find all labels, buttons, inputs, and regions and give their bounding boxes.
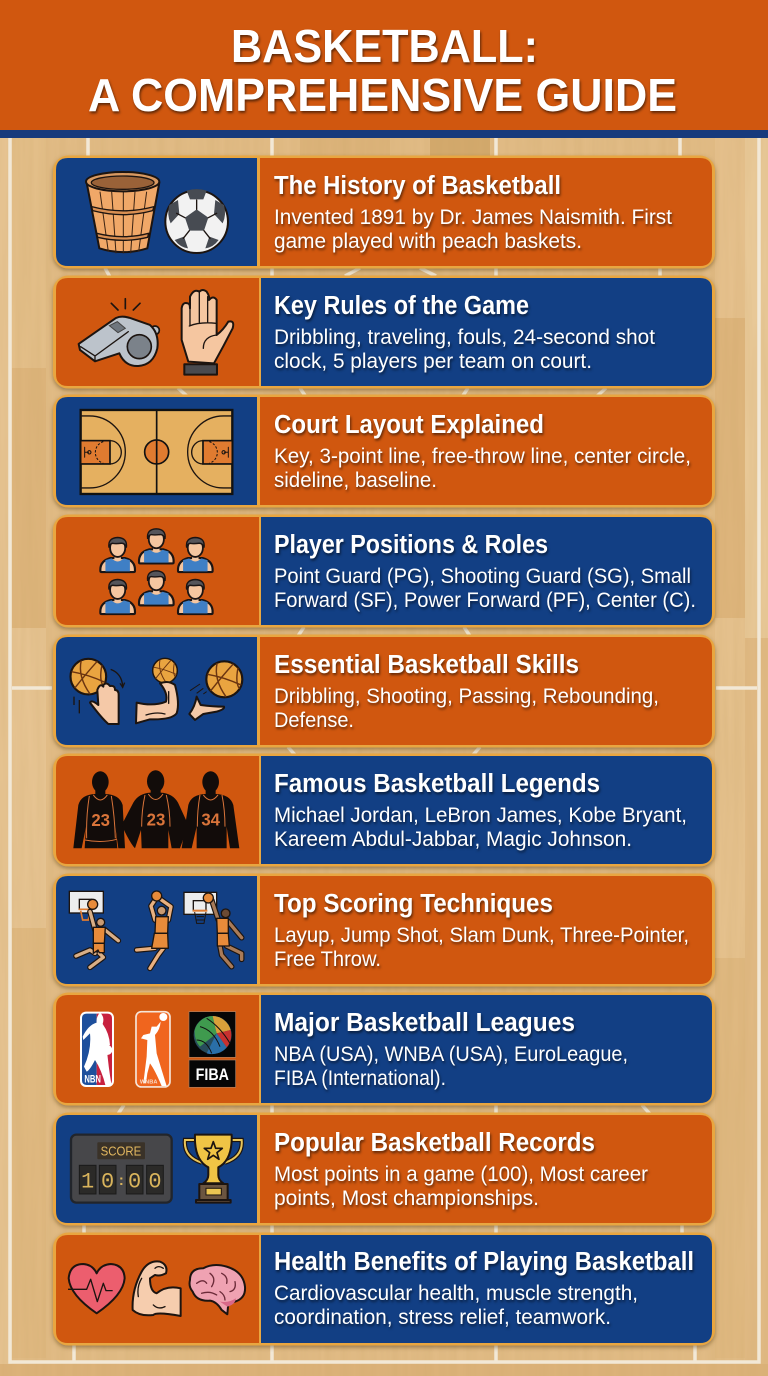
header banner [0,0,768,138]
panel: player positions [54,516,714,626]
slam dunk player [184,892,242,967]
panel: famous legends: Kareem Abdul-Jabbar, Magic Johnson. [274,828,632,851]
panel: health benefits: Health Benefits of Playing Basketball [274,1248,694,1276]
scoreboard: 0 [101,1169,114,1194]
logo: NBA [80,1012,114,1087]
scoreboard: : [119,1173,124,1189]
icon: scoreboard and trophy [71,1135,242,1203]
brain [190,1265,245,1314]
icon: legend silhouettes [73,770,239,848]
panel: scoring techniques: Layup, Jump Shot, Slam Dunk, Three-Pointer, [274,924,689,947]
panel: scoring techniques [54,875,714,985]
panel: key rules: Dribbling, traveling, fouls, 24-second shot [274,326,655,349]
panel: records: Most points in a game (100), Most career [274,1163,648,1186]
icon: court diagram [81,410,232,494]
heart [68,1264,125,1313]
panel: famous legends [54,755,714,865]
scoreboard: 0 [148,1169,162,1194]
scoreboard [71,1135,172,1203]
panel: major leagues: NBA (USA), WNBA (USA), EuroLeague, [274,1043,628,1066]
panel: court layout: Court Layout Explained [274,411,544,439]
flexed arm [133,1261,181,1316]
panel: player positions: Point Guard (PG), Shooting Guard (SG), Small [274,565,691,588]
panel: history of basketball: game played with peach baskets. [274,230,582,253]
panel: major leagues: FIBA (International). [274,1067,446,1090]
icon: layup, jump shot, slam dunk [69,891,242,968]
icon: legend silhouettes: 34 [201,809,220,829]
panel: famous legends: Famous Basketball Legends [274,770,600,798]
logo: FIBA [189,1012,236,1087]
title [88,20,677,121]
logo: FIBA: FIBA [196,1065,229,1084]
scoreboard: SCORE [101,1145,141,1159]
logo: NBA: NBN [84,1073,101,1085]
panel: court layout: sideline, baseline. [274,469,437,492]
scoreboard: 0 [128,1169,141,1194]
panel: records: points, Most championships. [274,1187,539,1210]
panel: records [54,1114,714,1224]
icon: legend silhouettes: 23 [91,810,110,830]
layup player [69,891,118,967]
panel: essential skills: Essential Basketball Skills [274,651,579,679]
icon: legend silhouettes: 23 [147,809,166,829]
panel: key rules [54,277,714,387]
panel: court layout: Key, 3-point line, free-throw line, center circle, [274,445,691,468]
icon: dribble, shoot, pass [70,658,242,724]
panel: court layout [54,396,714,506]
trophy [185,1135,242,1203]
panel: famous legends: Michael Jordan, LeBron James, Kobe Bryant, [274,804,687,827]
panel: records: Popular Basketball Records [274,1129,595,1157]
logo: WNBA [136,1012,170,1087]
title: BASKETBALL: [231,20,538,72]
panel: player positions: Player Positions & Roles [274,531,548,559]
jump shot player [137,891,171,968]
icon: heart, muscle, brain [68,1261,245,1316]
panel: history of basketball [54,157,714,267]
panel: history of basketball: The History of Basketball [274,172,561,200]
panel: major leagues [54,994,714,1104]
icon: whistle and raised hand [79,290,233,375]
title: A COMPREHENSIVE GUIDE [88,69,677,121]
panel: essential skills: Defense. [274,709,354,732]
panel: health benefits [54,1234,714,1344]
panel: key rules: Key Rules of the Game [274,292,529,320]
panel: player positions: Forward (SF), Power Forward (PF), Center (C). [274,589,696,612]
panel: health benefits: Cardiovascular health, muscle strength, [274,1282,638,1305]
scoreboard: 1 [81,1169,94,1194]
icon: six players [100,529,213,614]
panel: essential skills: Dribbling, Shooting, Passing, Rebounding, [274,685,659,708]
panel: essential skills [54,636,714,746]
icon: peach basket and ball [86,172,228,253]
panel: scoring techniques: Top Scoring Techniques [274,890,553,918]
logo: WNBA: WNBA [140,1079,157,1085]
icon: league logos [80,1012,236,1087]
panel: major leagues: Major Basketball Leagues [274,1009,575,1037]
panel: health benefits: coordination, stress relief, teamwork. [274,1306,611,1329]
panel: history of basketball: Invented 1891 by Dr. James Naismith. First [274,206,672,229]
panel: key rules: clock, 5 players per team on court. [274,350,592,373]
panel: scoring techniques: Free Throw. [274,948,381,971]
